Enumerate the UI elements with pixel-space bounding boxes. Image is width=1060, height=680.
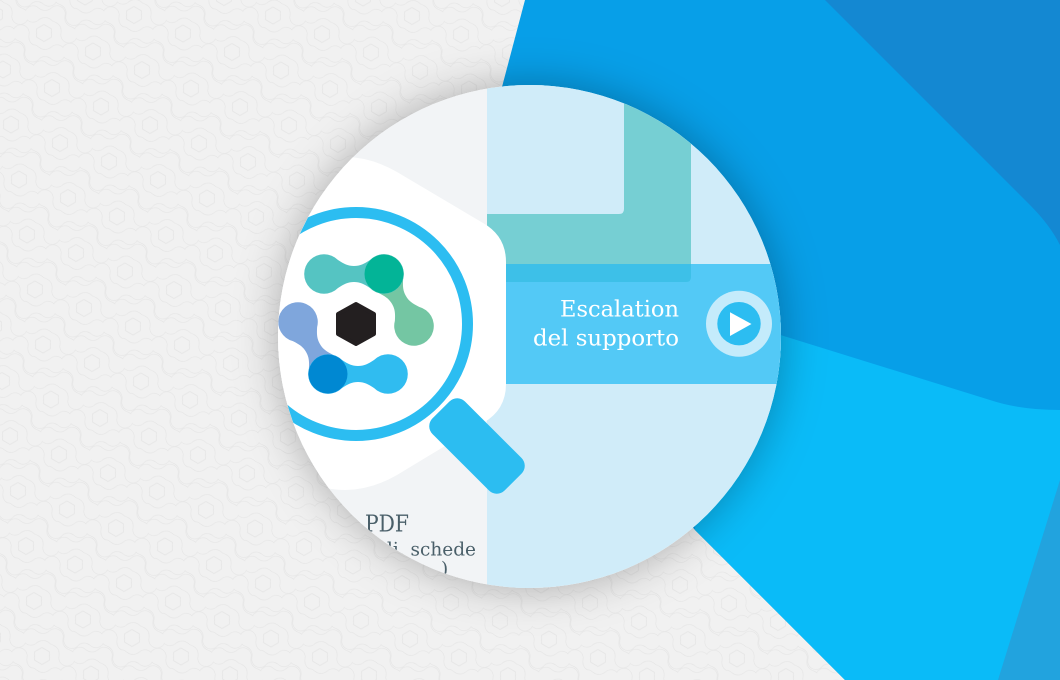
shape: main blue xyxy=(480,0,1060,680)
text: PDF caption xyxy=(366,514,475,574)
shape: bright blue bottom xyxy=(695,310,1060,680)
panel: teal overlap on bar xyxy=(506,264,691,282)
icon: magnifying glass xyxy=(288,207,525,494)
text: PDF caption: di, schede xyxy=(381,540,476,560)
panel: white rounded hexagon xyxy=(278,158,506,490)
logo: periwinkle link xyxy=(278,302,342,394)
magnifier ring xyxy=(288,207,473,441)
logo: green link xyxy=(370,254,434,346)
logo: dark teal node xyxy=(364,254,404,294)
shape: dark blue top right xyxy=(825,0,1060,245)
magnified content circle xyxy=(278,85,781,588)
text: PDF caption: ) xyxy=(441,559,448,580)
logo: teal link xyxy=(304,254,404,294)
magnifier handle xyxy=(429,398,525,494)
heading: Escalation del supporto xyxy=(533,296,679,352)
logo: dark blue node xyxy=(308,354,348,394)
magnifier circle shadow base xyxy=(278,85,781,588)
logo: light blue link xyxy=(308,354,408,394)
heading: Escalation del supporto: del supporto xyxy=(533,326,679,352)
logo: black hexagon xyxy=(338,304,374,344)
panel: left grey column xyxy=(382,540,383,541)
panel: teal L-shaped block xyxy=(487,104,691,264)
panel: escalation bar xyxy=(506,264,786,384)
heading: Escalation del supporto: Escalation xyxy=(560,296,679,322)
shape: muted blue corner xyxy=(998,480,1060,680)
background: blue geometric shapes xyxy=(480,0,1060,680)
panel: right light blue column xyxy=(487,80,787,595)
icon: play button xyxy=(706,291,772,357)
text: PDF caption: PDF xyxy=(365,512,409,538)
icon: logo mark xyxy=(278,254,434,394)
